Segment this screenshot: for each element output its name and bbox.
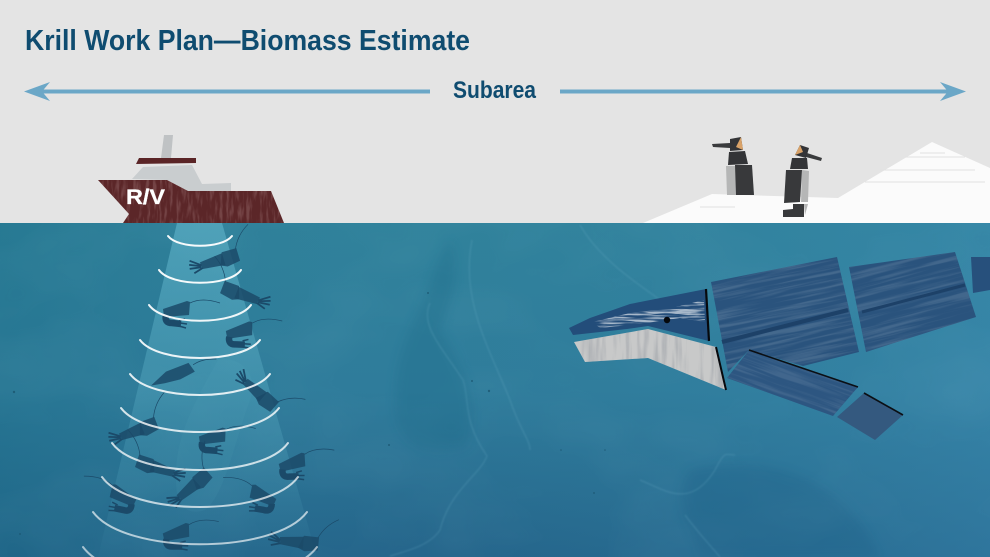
research vessel [98, 135, 284, 223]
beak [712, 143, 730, 148]
light patch [176, 359, 253, 512]
krill 13 [216, 475, 279, 517]
flipper upper [706, 308, 879, 458]
legs [793, 204, 804, 217]
flipper tip [837, 393, 903, 440]
whale head [569, 289, 709, 341]
krill 12 [76, 473, 139, 518]
subarea label: Subarea [453, 77, 537, 104]
krill 7 [102, 392, 173, 446]
eye [664, 317, 670, 323]
rear body [826, 222, 990, 382]
beak [806, 153, 822, 161]
neck [728, 151, 748, 165]
tail section [971, 257, 990, 293]
ice field [643, 142, 990, 223]
krill 15 [267, 504, 339, 557]
bridge roof [136, 158, 196, 164]
krill 8 [199, 426, 257, 455]
krill 1 [185, 224, 254, 274]
whale [569, 222, 990, 458]
ocean [0, 223, 990, 557]
krill 14 [162, 519, 221, 552]
body [735, 165, 754, 195]
krill 6 [233, 350, 305, 426]
penguin right [783, 145, 822, 217]
specks [13, 292, 606, 535]
krill swarm [76, 224, 339, 557]
dark swirls [395, 240, 880, 557]
head [795, 145, 809, 158]
lower jaw [574, 329, 726, 390]
sonar pulses [83, 236, 317, 557]
krill 11 [277, 447, 338, 483]
subarea arrow: left [24, 82, 430, 101]
back [801, 170, 809, 202]
mast [161, 135, 173, 158]
krill 10 [151, 441, 227, 510]
krill 3 [163, 300, 220, 328]
krill 2 [206, 256, 277, 310]
krill 5 [148, 356, 219, 387]
neck [790, 158, 808, 169]
cabin [132, 165, 231, 191]
light current lines [390, 225, 735, 557]
sky background [0, 0, 990, 223]
vessel name: R/V [126, 186, 165, 209]
krill 9 [121, 430, 191, 482]
title: Krill Work Plan—Biomass Estimate [25, 25, 470, 57]
sonar beam [98, 223, 317, 557]
front body [688, 227, 882, 402]
head [730, 137, 743, 151]
penguin left [712, 137, 754, 195]
body [784, 170, 802, 203]
hull [98, 180, 284, 223]
back [726, 166, 736, 195]
subarea arrow: right [560, 82, 966, 101]
krill 4 [225, 318, 284, 350]
